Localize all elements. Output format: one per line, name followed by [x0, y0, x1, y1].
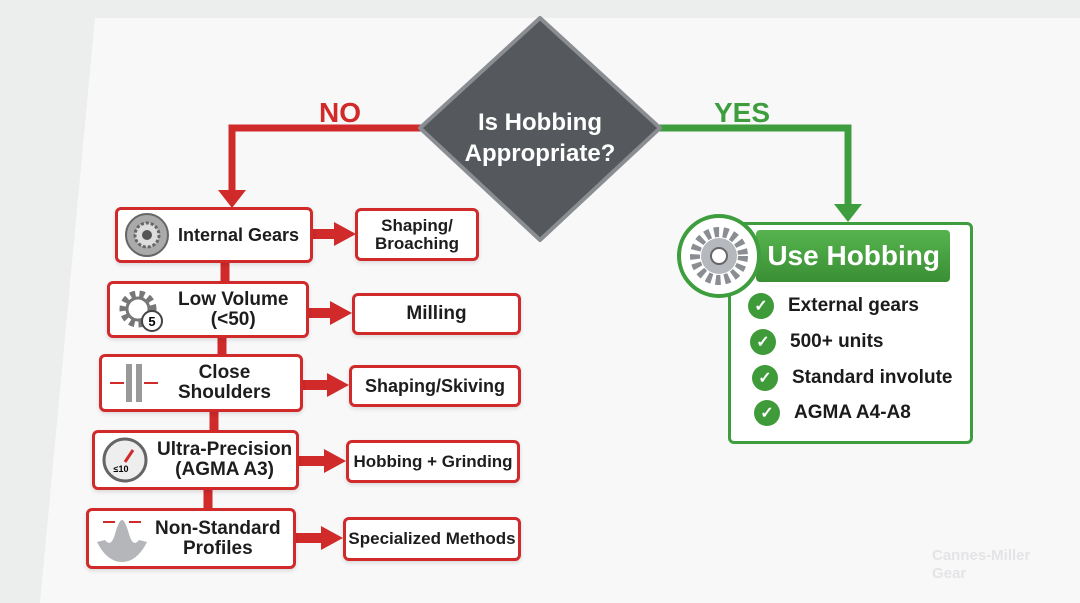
box: Milling: Milling	[406, 303, 467, 324]
box: Low Volume	[107, 281, 309, 338]
box: Close Shoulders	[99, 354, 303, 412]
decision diamond: Is Hobbing	[478, 109, 602, 136]
box: Shaping/Skiving: Shaping/Skiving	[365, 376, 505, 396]
box: Shaping/Skiving	[349, 365, 521, 407]
checklist: ✓	[756, 334, 770, 351]
checklist: External gears	[788, 295, 919, 316]
arrows to outcomes	[295, 222, 356, 550]
box: Close Shoulders: Shoulders	[178, 382, 271, 403]
arrow: YES branch	[655, 128, 862, 222]
box: Non-Standard Profiles: Non-Standard	[155, 518, 281, 539]
box: Internal Gears	[115, 207, 313, 263]
checklist: ✓	[760, 405, 774, 422]
checklist: ✓	[754, 298, 768, 315]
box: Non-Standard Profiles: Profiles	[183, 538, 253, 558]
box: Ultra-Precision: ≤10	[114, 464, 128, 474]
label NO: NO	[319, 97, 361, 128]
box: Ultra-Precision	[92, 430, 299, 490]
box: Ultra-Precision: Ultra-Precision	[157, 439, 292, 460]
box: Low Volume: 5	[148, 314, 156, 328]
box: Specialized Methods	[343, 517, 521, 561]
box: Non-Standard Profiles	[86, 508, 296, 569]
checklist: 500+ units	[790, 331, 883, 352]
label YES: YES	[714, 97, 770, 128]
arrow: NO branch	[218, 128, 425, 208]
box: Specialized Methods: Specialized Methods	[348, 529, 516, 548]
icon: gear	[677, 214, 761, 298]
header: Use Hobbing	[756, 230, 950, 282]
box: Internal Gears: Internal Gears	[178, 225, 299, 245]
box: Hobbing + Grinding	[346, 440, 520, 483]
box: Hobbing + Grinding: Hobbing + Grinding	[353, 452, 513, 471]
watermark: Cannes-Miller	[932, 547, 1031, 564]
decision diamond	[420, 18, 660, 240]
box: Shaping/Broaching: Shaping/	[381, 216, 453, 235]
watermark: Gear	[932, 565, 966, 582]
watermark	[932, 547, 1031, 582]
box: Milling	[352, 293, 521, 335]
box: Low Volume: Low Volume	[178, 289, 288, 310]
box: Shaping/Broaching	[355, 208, 479, 261]
panel: Use Hobbing	[677, 214, 973, 444]
box: Low Volume: (<50)	[211, 308, 256, 330]
box: Close Shoulders: Close	[199, 362, 250, 383]
connectors	[208, 262, 225, 510]
box: Shaping/Broaching: Broaching	[375, 234, 459, 252]
checklist: AGMA A4-A8	[794, 402, 911, 423]
checklist: ✓	[758, 370, 772, 387]
decision diamond: Appropriate?	[465, 140, 615, 167]
header: Use Hobbing: Use Hobbing	[767, 240, 940, 271]
box: Ultra-Precision: (AGMA A3)	[175, 459, 274, 480]
checklist: Standard involute	[792, 367, 952, 388]
checklist	[748, 293, 952, 426]
